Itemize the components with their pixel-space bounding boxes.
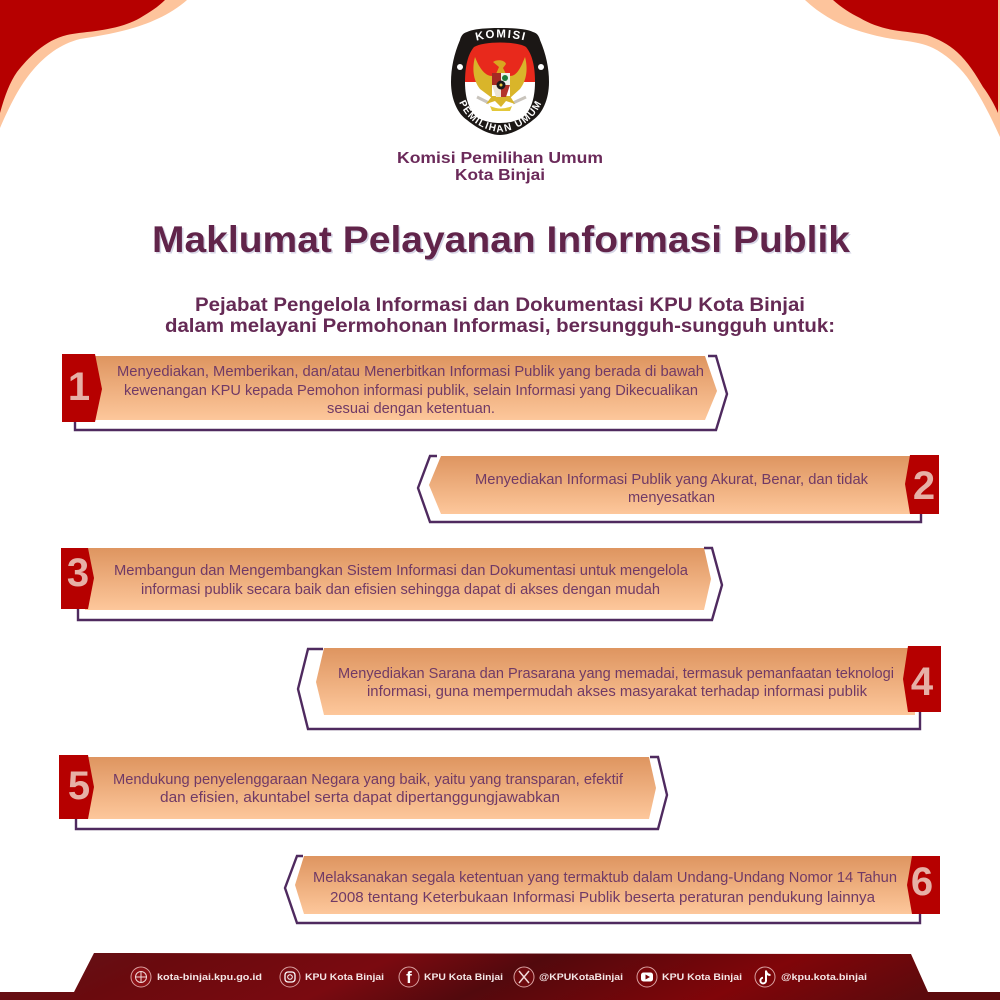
item 4: 4	[911, 660, 934, 704]
icon: garuda	[473, 57, 527, 111]
subtitle: Pejabat Pengelola Informasi dan Dokumentasi KPU Kota Binjai	[195, 295, 805, 316]
item 1: Menyediakan, Memberikan, dan/atau Menerbitkan Informasi Publik yang berada di bawah	[117, 363, 704, 380]
item 2: 2	[913, 464, 935, 508]
title: Maklumat Pelayanan Informasi Publik	[154, 220, 852, 262]
item 2	[418, 455, 939, 522]
footer: instagram: KPU Kota Binjai	[305, 972, 384, 982]
item 4: informasi, guna mempermudah akses masyarakat terhadap informasi publik	[367, 683, 867, 700]
logo lettering: PEMILIHAN UMUM	[459, 100, 542, 132]
item 3	[61, 548, 722, 620]
corner decoration: top left	[0, 0, 187, 128]
footer bar	[0, 953, 1000, 1000]
item 2: menyesatkan	[628, 489, 715, 506]
item 4: Menyediakan Sarana dan Prasarana yang memadai, termasuk pemanfaatan teknologi	[338, 665, 894, 682]
item 5: 5	[68, 764, 90, 808]
footer: x	[514, 967, 623, 987]
item 1	[62, 354, 727, 430]
subtitle	[165, 295, 835, 337]
title: Maklumat Pelayanan Informasi Publik	[152, 219, 850, 260]
footer: facebook	[399, 967, 503, 987]
organisation name	[397, 150, 603, 184]
footer: facebook: KPU Kota Binjai	[424, 972, 503, 982]
footer: youtube: KPU Kota Binjai	[662, 972, 742, 982]
item 4	[298, 646, 941, 729]
organisation name: Komisi Pemilihan Umum	[397, 150, 603, 167]
organisation name: Kota Binjai	[455, 167, 545, 184]
item 3: 3	[67, 551, 89, 595]
item 3: Membangun dan Mengembangkan Sistem Informasi dan Dokumentasi untuk mengelola	[114, 562, 689, 579]
item 1: kewenangan KPU kepada Pemohon informasi publik, selain Informasi yang Dikecualikan	[124, 382, 698, 399]
footer: youtube	[637, 967, 742, 987]
logo lettering: KOMISI	[475, 30, 526, 40]
logo: KPU emblem	[451, 28, 549, 135]
footer: tiktok	[755, 967, 867, 987]
item 2: Menyediakan Informasi Publik yang Akurat, Benar, dan tidak	[475, 471, 868, 488]
item 5	[59, 755, 667, 829]
item 1: 1	[68, 365, 90, 409]
item 5: Mendukung penyelenggaraan Negara yang baik, yaitu yang transparan, efektif	[113, 771, 624, 788]
logo lettering	[459, 30, 542, 132]
subtitle: dalam melayani Permohonan Informasi, bersungguh-sungguh untuk:	[165, 316, 835, 337]
footer: website	[131, 967, 262, 987]
item 6	[285, 856, 940, 923]
footer: facebook: f	[406, 968, 412, 987]
item 5: dan efisien, akuntabel serta dapat dipertanggungjawabkan	[160, 789, 560, 806]
item 6: 2008 tentang Keterbukaan Informasi Publik beserta peraturan pendukung lainnya	[330, 889, 876, 906]
item 6: 6	[911, 860, 933, 904]
item 1: sesuai dengan ketentuan.	[327, 400, 495, 417]
footer: tiktok: @kpu.kota.binjai	[781, 972, 867, 982]
item 6: Melaksanakan segala ketentuan yang termaktub dalam Undang-Undang Nomor 14 Tahun	[313, 869, 897, 886]
item 3: informasi publik secara baik dan efisien sehingga dapat di akses dengan mudah	[141, 581, 660, 598]
corner decoration: top right	[805, 0, 1000, 137]
footer: instagram	[280, 967, 384, 987]
footer: website: kota-binjai.kpu.go.id	[157, 972, 262, 982]
footer: x: @KPUKotaBinjai	[539, 972, 623, 982]
